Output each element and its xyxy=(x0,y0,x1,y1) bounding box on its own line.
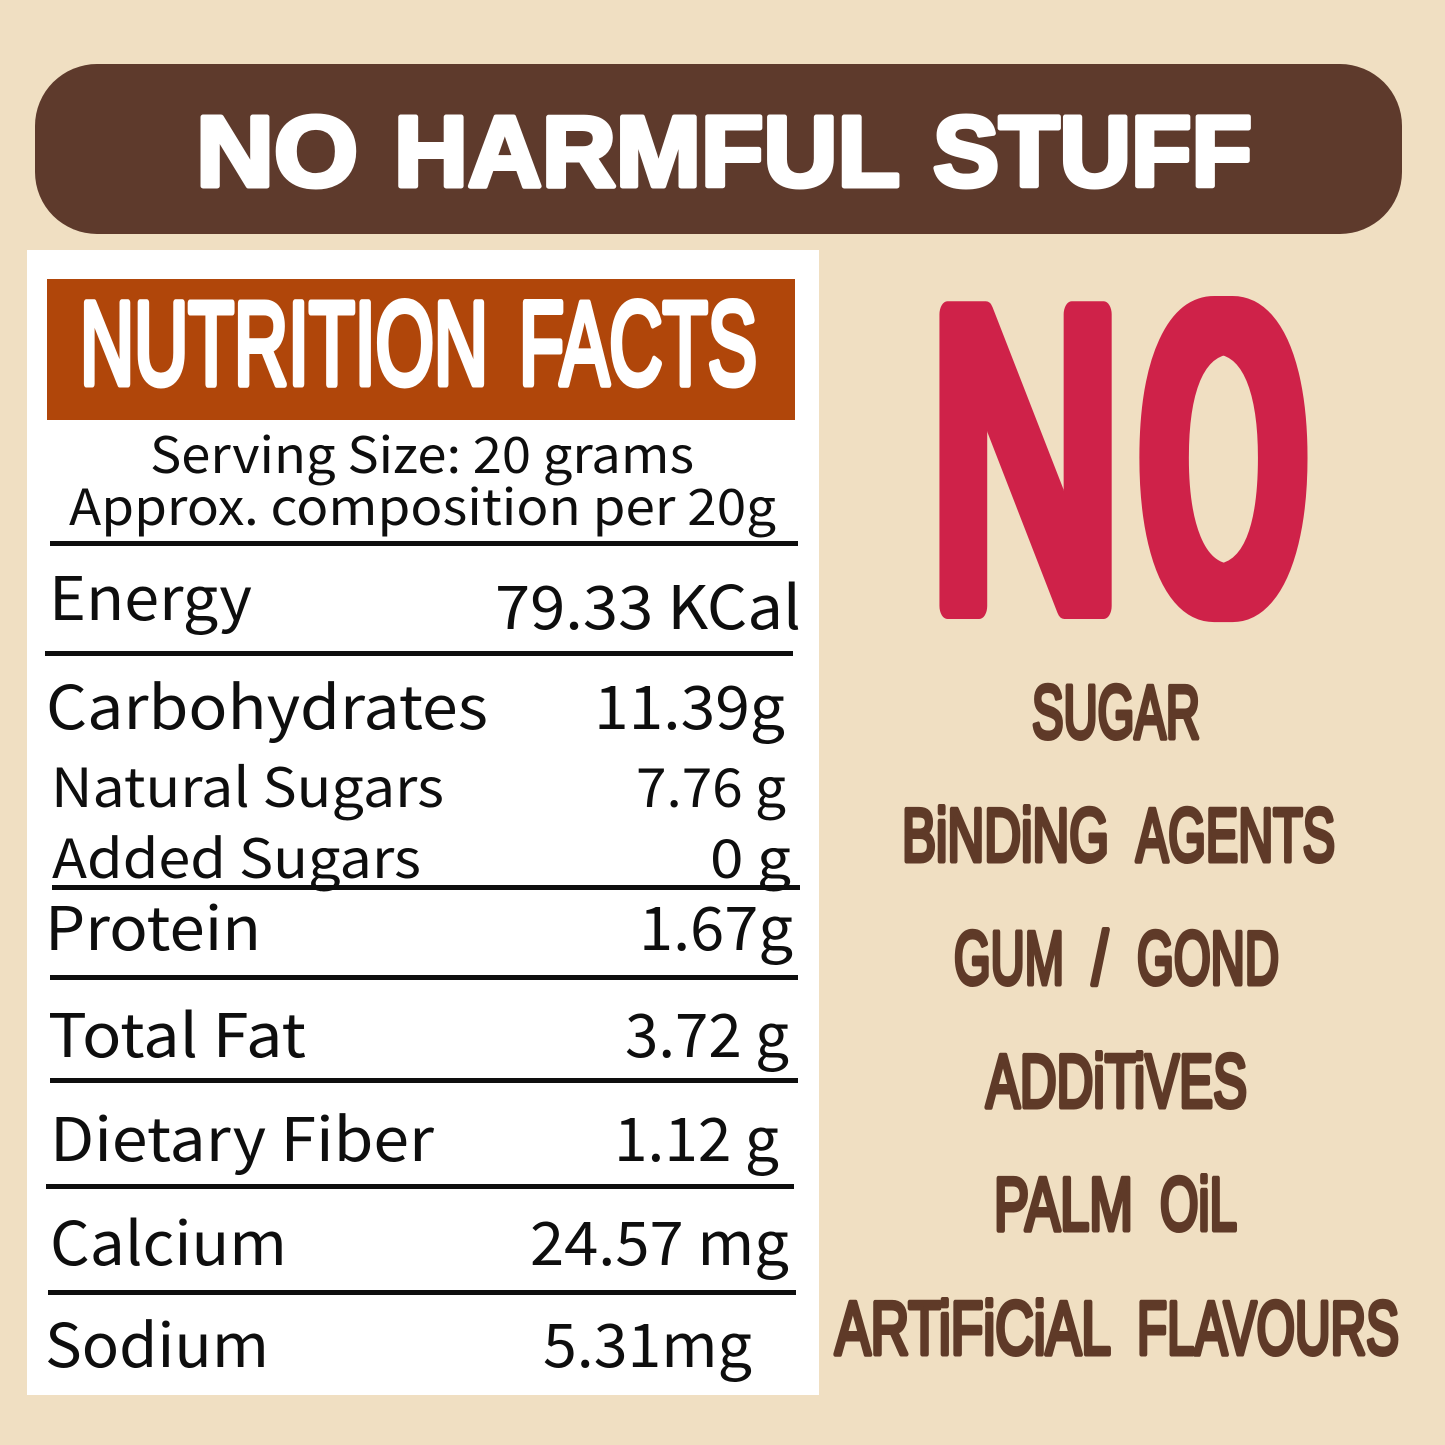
row: dietary fiber: 1.12 g xyxy=(614,1092,779,1179)
row: energy xyxy=(49,551,801,647)
item: sugar: SUGAR xyxy=(1032,670,1200,754)
item: gum / gond: / xyxy=(1092,916,1108,1000)
row: carbohydrates: Carbohydrates xyxy=(46,660,488,747)
item: binding agents: BiNDiNG xyxy=(902,793,1109,877)
item: palm oil: PALM xyxy=(994,1162,1133,1246)
row: protein: Protein xyxy=(45,881,261,968)
row: natural sugars: Natural Sugars xyxy=(51,744,444,823)
row: total fat: 3.72 g xyxy=(625,988,789,1075)
item: artificial flavours xyxy=(835,1286,1399,1370)
item: additives: ADDiTiVES xyxy=(986,1039,1247,1123)
row: dietary fiber: Dietary Fiber xyxy=(50,1092,435,1179)
row: sodium: 5.31mg xyxy=(543,1298,752,1385)
nutrition heading: NUTRITION xyxy=(80,278,488,410)
title xyxy=(196,96,1252,208)
row: energy: 79.33 KCal xyxy=(495,560,801,647)
title: STUFF xyxy=(933,96,1252,208)
list of excluded ingredients xyxy=(835,670,1399,1370)
row: protein: 1.67g xyxy=(639,881,793,968)
row: added sugars: Added Sugars xyxy=(52,815,421,894)
panel: nutrition facts xyxy=(27,250,819,1395)
row: calcium: 24.57 mg xyxy=(530,1196,789,1283)
nutrition heading: FACTS xyxy=(519,278,757,410)
serving size text xyxy=(69,416,776,540)
item: gum / gond: GUM xyxy=(954,916,1064,1000)
row: added sugars: 0 g xyxy=(710,815,791,894)
row: carbohydrates: 11.39g xyxy=(594,660,785,747)
item: binding agents: AGENTS xyxy=(1136,793,1335,877)
title banner xyxy=(35,64,1402,234)
row: carbohydrates xyxy=(46,660,785,747)
big red NO: N xyxy=(931,222,1120,696)
row: natural sugars xyxy=(51,744,786,823)
item: gum / gond xyxy=(954,916,1279,1000)
row: natural sugars: 7.76 g xyxy=(636,744,786,823)
row: added sugars xyxy=(52,815,791,894)
row: total fat xyxy=(48,988,789,1075)
item: gum / gond: GOND xyxy=(1137,916,1279,1000)
item: palm oil: OiL xyxy=(1160,1162,1237,1246)
row: protein xyxy=(45,881,793,968)
serving size text: Serving Size: 20 grams xyxy=(150,416,694,488)
row: dietary fiber xyxy=(50,1092,779,1179)
serving size text: Approx. composition per 20g xyxy=(69,468,776,540)
row: total fat: Total Fat xyxy=(48,988,306,1075)
row: calcium xyxy=(50,1196,789,1283)
row: energy: Energy xyxy=(49,551,252,638)
row: sodium: Sodium xyxy=(45,1298,269,1385)
row: sodium xyxy=(45,1298,752,1385)
title: HARMFUL xyxy=(394,96,900,208)
item: artificial flavours: ARTiFiCiAL xyxy=(835,1286,1111,1370)
row: calcium: Calcium xyxy=(50,1196,287,1283)
title: NO xyxy=(196,96,358,208)
